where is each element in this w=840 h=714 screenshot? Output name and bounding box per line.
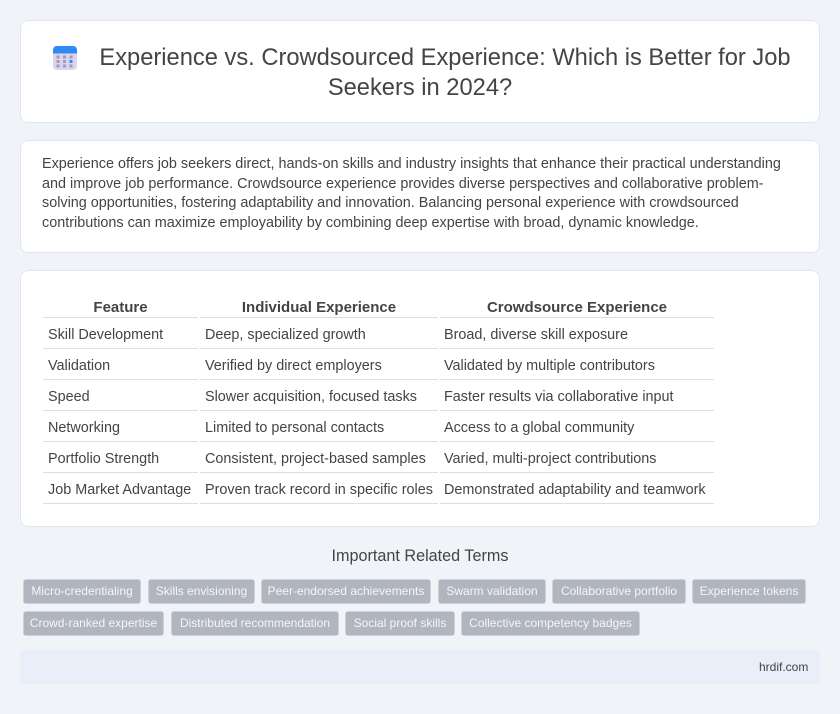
related terms tags: Swarm validation [446, 584, 538, 598]
comparison table: Proven track record in specific roles [205, 482, 433, 498]
comparison table: Portfolio Strength [48, 451, 159, 467]
panel: summary card [20, 140, 820, 253]
summary text: and improve job performance. Crowdsource experience provides diverse perspectives and collaborative problem- [42, 176, 764, 192]
summary text: Experience offers job seekers direct, hands-on skills and industry insights that enhance their practical understanding [42, 156, 781, 172]
footer source: hrdif.com [759, 660, 808, 674]
comparison table: Broad, diverse skill exposure [444, 327, 628, 343]
related terms tags: Collective competency badges [469, 616, 632, 630]
comparison table: Validation [48, 358, 110, 374]
related terms tags: Social proof skills [354, 616, 446, 630]
title [99, 45, 791, 101]
comparison table: Demonstrated adaptability and teamwork [444, 482, 706, 498]
comparison table: Job Market Advantage [48, 482, 191, 498]
summary text [42, 156, 781, 231]
summary text: solving opportunities, fostering adaptability and innovation. Balancing personal experience with crowdsourced [42, 195, 739, 211]
comparison table: Feature [93, 299, 148, 316]
related terms tags: Peer-endorsed achievements [268, 584, 424, 598]
comparison table: Deep, specialized growth [205, 327, 366, 343]
related terms tags: Distributed recommendation [180, 616, 330, 630]
title: Seekers in 2024? [328, 75, 512, 101]
title: Experience vs. Crowdsourced Experience: Which is Better for Job [99, 45, 791, 71]
related terms tags: Collaborative portfolio [561, 584, 677, 598]
comparison table: Varied, multi-project contributions [444, 451, 656, 467]
related terms tags [23, 579, 806, 636]
heading: related terms: Important Related Terms [332, 547, 508, 565]
panel: title card [20, 20, 820, 123]
summary text: contributions can maximize employability by combining deep expertise with broad, dynamic knowledge. [42, 215, 699, 231]
comparison table: Limited to personal contacts [205, 420, 384, 436]
icon: calendar [53, 46, 77, 70]
comparison table: Skill Development [48, 327, 163, 343]
comparison table [43, 299, 714, 504]
comparison table: Crowdsource Experience [487, 299, 667, 316]
comparison table: Networking [48, 420, 120, 436]
related terms tags: Experience tokens [700, 584, 798, 598]
comparison table: Speed [48, 389, 90, 405]
comparison table: Individual Experience [242, 299, 396, 316]
comparison table: Faster results via collaborative input [444, 389, 674, 405]
comparison table: Verified by direct employers [205, 358, 382, 374]
panel: comparison table card [20, 270, 820, 527]
comparison table: Slower acquisition, focused tasks [205, 389, 417, 405]
comparison table: Validated by multiple contributors [444, 358, 655, 374]
related terms tags: Skills envisioning [156, 584, 247, 598]
related terms tags: Crowd-ranked expertise [30, 616, 157, 630]
comparison table: Access to a global community [444, 420, 634, 436]
footer bar [20, 650, 820, 684]
comparison table: Consistent, project-based samples [205, 451, 426, 467]
related terms tags: Micro-credentialing [31, 584, 133, 598]
